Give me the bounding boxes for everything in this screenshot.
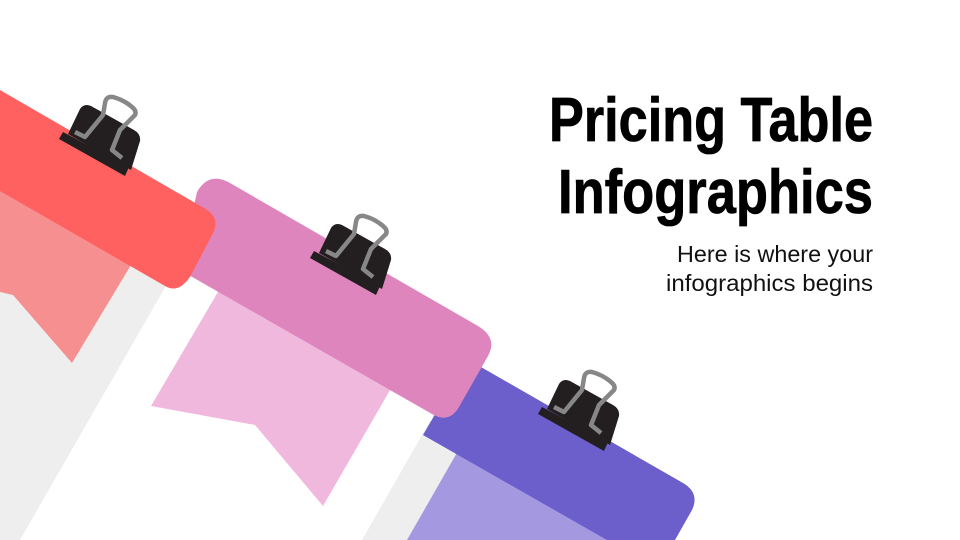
subtitle: Here is where your [677, 241, 873, 267]
icon: purple binder clip [538, 372, 619, 451]
subtitle: infographics begins [666, 270, 873, 296]
red sheet [0, 180, 175, 540]
title: Pricing Table [549, 86, 873, 155]
purple header band [423, 359, 695, 540]
title: Infographics [558, 158, 873, 227]
card: pink [151, 179, 491, 506]
purple sheet [362, 421, 480, 540]
purple ribbon [407, 430, 620, 540]
subtitle [666, 241, 873, 296]
pink header band [180, 179, 491, 418]
title [549, 86, 873, 227]
card: red [0, 90, 216, 540]
icon: pink binder clip [310, 216, 391, 295]
card: purple [362, 359, 695, 540]
icon: red binder clip [59, 97, 140, 176]
red ribbon [0, 180, 140, 363]
red header band [0, 90, 216, 289]
pink ribbon [151, 280, 397, 506]
